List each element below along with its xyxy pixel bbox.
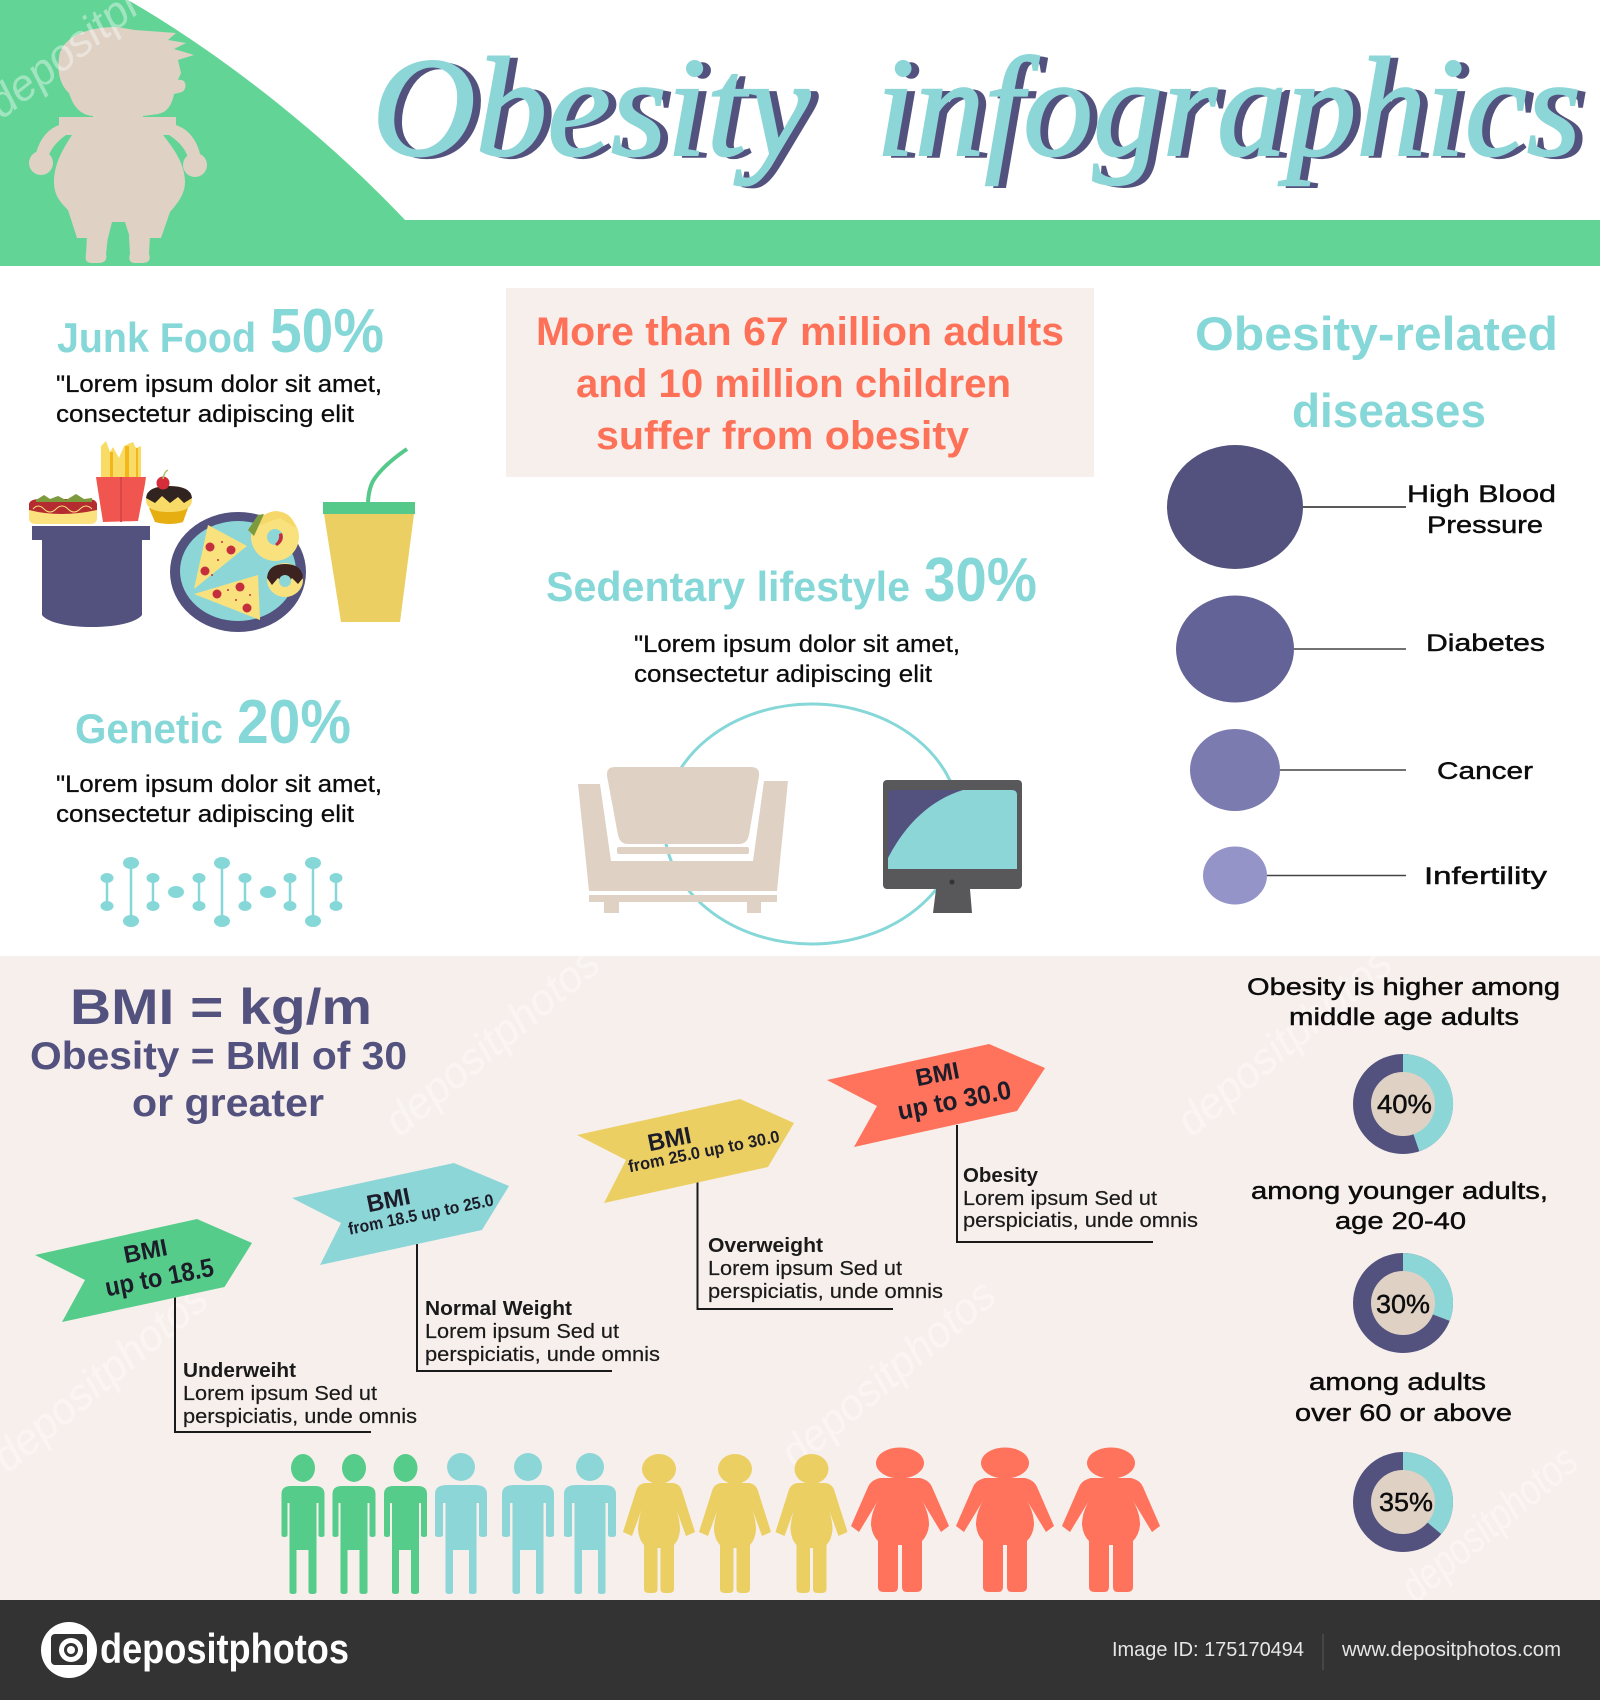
BMI step: underweight: BMI: [121, 1234, 170, 1269]
title: infographics: [884, 30, 1589, 188]
heading: sedentary lifestyle 30%: Sedentary lifestyle: [546, 563, 910, 610]
disease: high blood pressure: [1167, 445, 1556, 569]
watermarks: depositphotos: [1167, 938, 1401, 1146]
disease: infertility: Infertility: [1424, 863, 1547, 890]
heading: junk food 50%: Junk Food: [57, 314, 256, 361]
text: obesity by age heading: middle age adults: [1289, 1004, 1519, 1031]
icon: depositphotos logo: [41, 1622, 97, 1678]
callout: 67 million adults: and 10 million children: [576, 362, 1011, 406]
BMI step: normal weight: [292, 1163, 660, 1371]
BMI step: overweight: Overweight: [708, 1235, 823, 1257]
text: depositphotos wordmark: depositphotos: [100, 1625, 349, 1672]
text: genetic description: "Lorem ipsum dolor sit amet,: [56, 771, 382, 798]
text: junk food description: "Lorem ipsum dolor sit amet,: [56, 371, 382, 398]
watermarks: depositphotos: [771, 1270, 1005, 1478]
text: sedentary description: "Lorem ipsum dolor sit amet,: [634, 631, 960, 658]
title: Obesity: [372, 28, 811, 186]
icon: overweight boy silhouette: [29, 27, 207, 263]
text: younger adults: [1251, 1178, 1548, 1235]
disease: diabetes: Diabetes: [1426, 630, 1545, 657]
icon: cupcake: [146, 470, 192, 524]
text: adults over 60: over 60 or above: [1295, 1400, 1512, 1427]
icon: bucket: [32, 526, 150, 627]
icon: hot dog: [29, 494, 97, 524]
text: younger adults: age 20-40: [1335, 1208, 1466, 1235]
heading: BMI formula: Obesity = BMI of 30: [30, 1035, 407, 1078]
BMI step: overweight: [577, 1099, 943, 1309]
BMI step: normal weight: Lorem ipsum Sed ut: [425, 1321, 619, 1343]
watermarks: depositphotos: [375, 938, 609, 1146]
text: genetic description: [56, 771, 382, 828]
disease: high blood pressure: Pressure: [1427, 512, 1543, 539]
BMI step: overweight: BMI: [645, 1122, 694, 1157]
text: genetic description: consectetur adipiscing elit: [56, 801, 354, 828]
BMI step: obesity: Lorem ipsum Sed ut: [963, 1188, 1157, 1210]
callout: 67 million adults: [506, 288, 1094, 477]
chart: people weight progression: [282, 1448, 1160, 1594]
icon: dna strand: [100, 857, 342, 927]
text: obesity by age heading: [1247, 974, 1560, 1031]
donut: 40%: [1353, 1054, 1453, 1154]
panel: BMI section background: [0, 956, 1600, 1600]
panel: age group donuts: [1247, 974, 1560, 1552]
text: younger adults: among younger adults,: [1251, 1178, 1548, 1205]
text: junk food description: [56, 371, 382, 428]
heading: obesity-related diseases: diseases: [1292, 384, 1486, 437]
heading: BMI formula: [30, 979, 407, 1125]
title: infographics: [876, 28, 1581, 186]
text: sedentary description: consectetur adipiscing elit: [634, 661, 932, 688]
heading: junk food 50%: 50%: [270, 297, 384, 366]
header band: [0, 0, 1600, 266]
BMI step: obesity: Obesity: [963, 1165, 1039, 1187]
disease: high blood pressure: High Blood: [1407, 481, 1556, 508]
heading: BMI formula: or greater: [132, 1082, 324, 1125]
heading: genetic 20%: Genetic: [75, 705, 223, 752]
BMI step: underweight: perspiciatis, unde omnis: [183, 1406, 417, 1428]
icon: soda cup: [323, 449, 415, 622]
panel: junk food: [29, 297, 415, 632]
heading: obesity-related diseases: [1195, 307, 1558, 437]
BMI step: normal weight: perspiciatis, unde omnis: [425, 1344, 660, 1366]
callout: 67 million adults: suffer from obesity: [596, 414, 970, 458]
BMI step: obesity: [827, 1044, 1198, 1242]
BMI step: underweight: [35, 1219, 417, 1432]
heading: genetic 20%: [75, 688, 351, 757]
panel: obesity-related diseases: [1167, 307, 1558, 904]
BMI step: overweight: perspiciatis, unde omnis: [708, 1281, 943, 1303]
text: adults over 60: [1295, 1369, 1512, 1427]
BMI step: normal weight: from 18.5 up to 25.0: [346, 1191, 495, 1239]
heading: obesity-related diseases: Obesity-related: [1195, 307, 1558, 360]
icon: sofa: [578, 767, 788, 913]
BMI step: obesity: BMI: [913, 1057, 962, 1092]
donut: 35%: [1353, 1452, 1453, 1552]
heading: junk food 50%: [57, 297, 384, 366]
panel: sedentary lifestyle: [546, 546, 1037, 944]
title: Obesity: [380, 30, 819, 188]
disease: cancer: [1190, 729, 1533, 811]
BMI step: obesity: up to 30.0: [895, 1074, 1014, 1126]
BMI step: underweight: up to 18.5: [102, 1252, 216, 1302]
text: sedentary description: [634, 631, 960, 688]
BMI step: obesity: perspiciatis, unde omnis: [963, 1210, 1198, 1232]
text: junk food description: consectetur adipiscing elit: [56, 401, 354, 428]
footer bar: [0, 1600, 1600, 1700]
heading: BMI formula: BMI = kg/m: [70, 979, 372, 1035]
icon: pizza plate: [170, 511, 306, 632]
text: website: www.depositphotos.com: [1341, 1639, 1561, 1661]
disease: infertility: [1203, 846, 1547, 904]
donut: 30%: 30%: [1376, 1289, 1430, 1319]
title: [372, 28, 1589, 188]
disease: cancer: Cancer: [1437, 758, 1533, 785]
icon: fries: [96, 441, 146, 522]
ring behind sofa and monitor: [664, 704, 960, 944]
heading: sedentary lifestyle 30%: 30%: [924, 546, 1037, 615]
text: image id: Image ID: 175170494: [1112, 1639, 1304, 1661]
donut: 30%: [1353, 1253, 1453, 1353]
text: obesity by age heading: Obesity is higher among: [1247, 974, 1560, 1001]
heading: genetic 20%: 20%: [237, 688, 351, 757]
disease: diabetes: [1176, 596, 1545, 702]
text: adults over 60: among adults: [1309, 1369, 1486, 1396]
panel: genetic: [56, 688, 382, 927]
icon: monitor: [883, 780, 1022, 913]
donut: 35%: 35%: [1379, 1487, 1433, 1517]
BMI step: normal weight: BMI: [364, 1183, 413, 1218]
BMI step: underweight: Lorem ipsum Sed ut: [183, 1383, 377, 1405]
BMI step: normal weight: Normal Weight: [425, 1298, 572, 1320]
callout: 67 million adults: More than 67 million adults: [536, 310, 1064, 354]
BMI step: underweight: Underweiht: [183, 1360, 296, 1382]
BMI step: overweight: Lorem ipsum Sed ut: [708, 1258, 902, 1280]
donut: 40%: 40%: [1377, 1089, 1432, 1119]
BMI step: overweight: from 25.0 up to 30.0: [627, 1127, 781, 1176]
heading: sedentary lifestyle 30%: [546, 546, 1037, 615]
